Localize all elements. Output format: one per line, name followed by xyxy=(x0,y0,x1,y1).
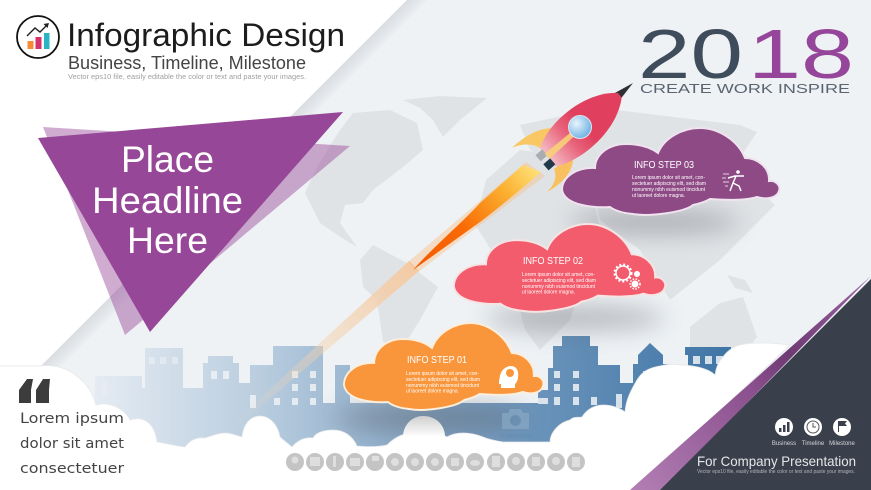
gray icon row xyxy=(286,453,585,471)
headline text: Place xyxy=(121,139,214,180)
photo placeholder xyxy=(500,409,532,440)
quote text xyxy=(20,411,124,477)
quote text: consectetuer xyxy=(20,461,124,477)
icon: growth chart logo xyxy=(17,16,59,58)
year 18: 18 xyxy=(748,15,854,93)
legend labels xyxy=(772,441,855,447)
porthole xyxy=(568,116,592,138)
step body: Lorem ipsum dolor sit amet, con- xyxy=(522,272,595,278)
quote block xyxy=(19,379,124,477)
windows xyxy=(102,356,723,408)
back triangle xyxy=(43,127,350,335)
step body: sectetuer adipiscing elit, sed diam xyxy=(406,377,480,383)
step body xyxy=(632,175,706,199)
step title: INFO STEP 01 xyxy=(407,355,467,366)
north america xyxy=(305,110,423,247)
icon: head with idea xyxy=(499,366,518,388)
shaded cloud lobe xyxy=(403,416,445,437)
icon: quote marks xyxy=(19,379,50,403)
rocket xyxy=(408,79,633,272)
year block xyxy=(638,15,854,96)
asia xyxy=(520,108,775,300)
flame xyxy=(413,165,541,270)
step body xyxy=(406,371,480,394)
islands xyxy=(727,275,753,293)
step title: INFO STEP 03 xyxy=(634,160,694,171)
cloud: step 03 xyxy=(562,128,779,215)
cloud: step 01 xyxy=(344,323,543,410)
antenna xyxy=(613,83,633,101)
step body: Lorem ipsum dolor sit amet, con- xyxy=(406,371,479,377)
purple ribbon xyxy=(630,276,871,490)
australia xyxy=(690,297,757,350)
icon: runner xyxy=(722,170,744,191)
cloud shape xyxy=(344,323,543,410)
africa xyxy=(475,150,600,350)
step body: Lorem ipsum dolor sit amet, con- xyxy=(632,175,705,181)
south america xyxy=(360,245,438,347)
front triangle xyxy=(38,112,343,332)
cloud shape xyxy=(454,224,665,312)
presentation title: For Company Presentation xyxy=(697,453,856,469)
photo label: YOUR PHOTO xyxy=(500,434,532,440)
cloud shadows xyxy=(335,210,740,430)
quote text: dolor sit amet xyxy=(20,436,124,452)
step body: sectetuer adipiscing elit, sed diam xyxy=(522,278,596,284)
step body: ut laoreet dolore magna. xyxy=(632,193,685,199)
headline text: Headline xyxy=(92,180,243,221)
corner legend xyxy=(697,418,856,475)
greenland xyxy=(403,96,487,137)
headline triangle xyxy=(38,112,350,335)
quote text: Lorem ipsum xyxy=(20,411,124,427)
step body: nonummy nibh euismod tincidunt xyxy=(522,284,596,290)
title: Infographic Design xyxy=(67,17,345,53)
step body: nonummy nibh euismod tincidunt xyxy=(632,187,706,193)
cloud: step 02 xyxy=(454,224,665,312)
dark panel xyxy=(660,279,871,490)
cloud shape xyxy=(562,128,779,215)
subtitle: Business, Timeline, Milestone xyxy=(68,53,306,73)
legend labels: Timeline xyxy=(802,441,825,447)
step body: ut laoreet dolore magna. xyxy=(406,388,459,394)
legend labels: Milestone xyxy=(829,441,855,447)
upper fin xyxy=(512,128,553,150)
icon: timeline xyxy=(804,418,822,436)
lower fin xyxy=(547,155,573,192)
legend labels: Business xyxy=(772,441,796,447)
year 20: 20 xyxy=(638,15,743,93)
white cloud base xyxy=(0,343,790,490)
lower right dark corner xyxy=(630,276,871,490)
step body: sectetuer adipiscing elit, sed diam xyxy=(632,181,706,187)
buildings xyxy=(95,336,731,450)
note: Vector eps10 file, easily editable the color or text and paste your images. xyxy=(68,74,306,81)
icon: business xyxy=(775,418,793,436)
headline text: Here xyxy=(127,220,208,261)
headline text xyxy=(92,139,243,261)
icon: camera xyxy=(502,409,529,429)
icon: gears xyxy=(614,264,640,289)
body xyxy=(528,79,633,179)
step body: nonummy nibh euismod tincidunt xyxy=(406,383,480,389)
tagline: CREATE WORK INSPIRE xyxy=(640,81,850,96)
step body xyxy=(522,272,596,296)
header xyxy=(17,16,345,81)
icon: milestone xyxy=(833,418,851,436)
presentation note: Vector eps10 file, easily editable the color or text and paste your images. xyxy=(697,469,855,475)
flame glow xyxy=(408,162,545,272)
step body: ut laoreet dolore magna. xyxy=(522,290,575,296)
world map xyxy=(305,96,775,350)
panel fold shading xyxy=(41,0,427,366)
step title: INFO STEP 02 xyxy=(523,256,583,267)
city skyline xyxy=(95,336,731,450)
rocket exhaust trail xyxy=(233,261,419,427)
